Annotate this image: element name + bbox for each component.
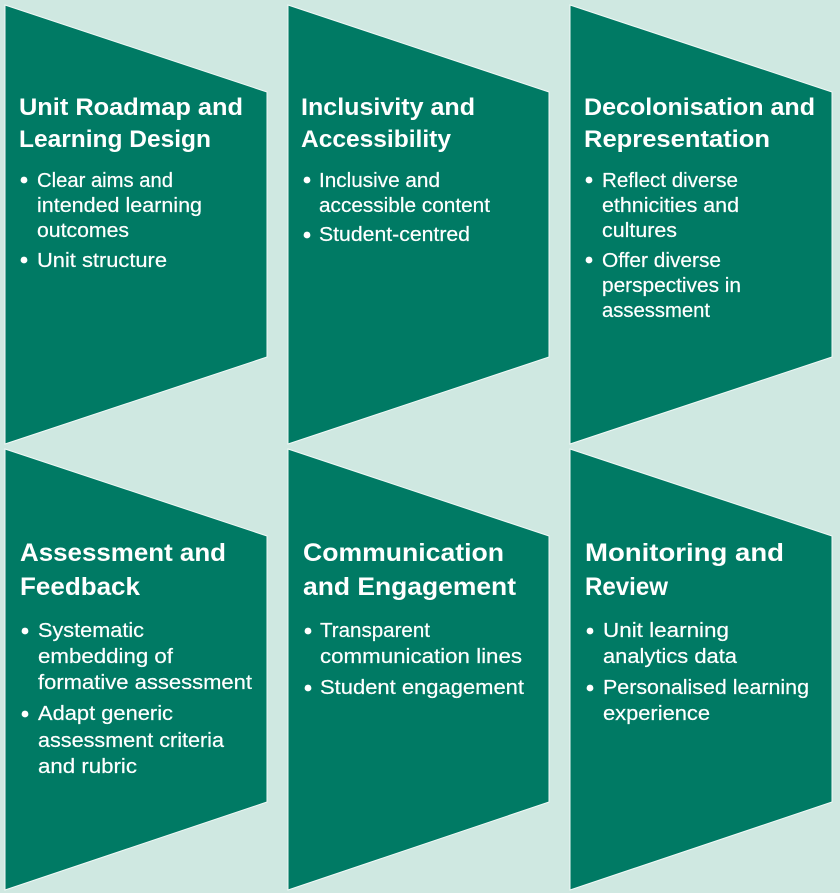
heading: Inclusivity and Accessibility: Accessibility	[301, 126, 452, 153]
bullet list: accessible content	[319, 195, 490, 217]
bullet list: embedding of	[38, 645, 173, 668]
bullet list	[587, 619, 809, 725]
bullet list	[586, 170, 741, 322]
bullet list	[22, 619, 252, 778]
panel: Decolonisation and Representation	[570, 5, 832, 444]
bullet list: Transparent	[320, 619, 430, 642]
bullet list: Student engagement	[320, 676, 524, 699]
bullet list: Personalised learning	[603, 676, 809, 699]
heading: Decolonisation and Representation	[584, 94, 815, 153]
bullet list: Inclusive and	[319, 170, 440, 192]
bullet list: outcomes	[37, 220, 129, 242]
bullet list: communication lines	[320, 645, 522, 668]
heading: Unit Roadmap and Learning Design	[19, 94, 243, 153]
bullet list	[305, 619, 524, 699]
bullet list: formative assessment	[38, 671, 252, 694]
bullet list	[304, 170, 490, 246]
heading: Inclusivity and Accessibility	[301, 94, 475, 153]
bullet list: experience	[603, 702, 710, 725]
bullet list: Unit learning	[603, 619, 729, 642]
bullet list: and rubric	[38, 755, 137, 778]
bullet list: assessment	[602, 300, 710, 322]
heading: Decolonisation and Representation: Decolonisation and	[584, 94, 815, 121]
heading: Unit Roadmap and Learning Design: Unit Roadmap and	[19, 94, 243, 121]
bullet list: Student-centred	[319, 224, 470, 246]
bullet list: ethnicities and	[602, 195, 739, 217]
heading: Communication and Engagement: Communication	[303, 539, 504, 567]
bullet list: Adapt generic	[38, 702, 173, 725]
panel: Communication and Engagement	[288, 449, 549, 890]
heading: Monitoring and Review	[585, 539, 784, 601]
bullet list: Offer diverse	[602, 250, 721, 272]
heading: Assessment and Feedback	[20, 539, 226, 601]
panel: Monitoring and Review	[570, 449, 832, 890]
heading: Monitoring and Review: Monitoring and	[585, 539, 784, 567]
bullet list: Reflect diverse	[602, 170, 738, 192]
heading: Assessment and Feedback: Assessment and	[20, 539, 226, 567]
bullet list: perspectives in	[602, 275, 741, 297]
heading: Decolonisation and Representation: Representation	[584, 126, 770, 153]
panel: Inclusivity and Accessibility	[288, 5, 549, 444]
bullet list: analytics data	[603, 645, 738, 668]
heading: Monitoring and Review: Review	[585, 573, 669, 601]
bullet list: intended learning	[37, 195, 202, 217]
bullet list	[21, 170, 202, 272]
bullet list: Unit structure	[37, 250, 167, 272]
panel: Unit Roadmap and Learning Design	[5, 5, 267, 444]
heading: Communication and Engagement: and Engagement	[303, 573, 517, 601]
heading: Inclusivity and Accessibility: Inclusivity and	[301, 94, 475, 121]
heading: Unit Roadmap and Learning Design: Learning Design	[19, 126, 211, 153]
bullet list: cultures	[602, 220, 677, 242]
panel: Assessment and Feedback	[5, 449, 267, 890]
bullet list: Systematic	[38, 619, 144, 642]
bullet list: Clear aims and	[37, 170, 173, 192]
bullet list: assessment criteria	[38, 729, 225, 752]
heading: Assessment and Feedback: Feedback	[20, 573, 140, 601]
heading: Communication and Engagement	[303, 539, 517, 601]
